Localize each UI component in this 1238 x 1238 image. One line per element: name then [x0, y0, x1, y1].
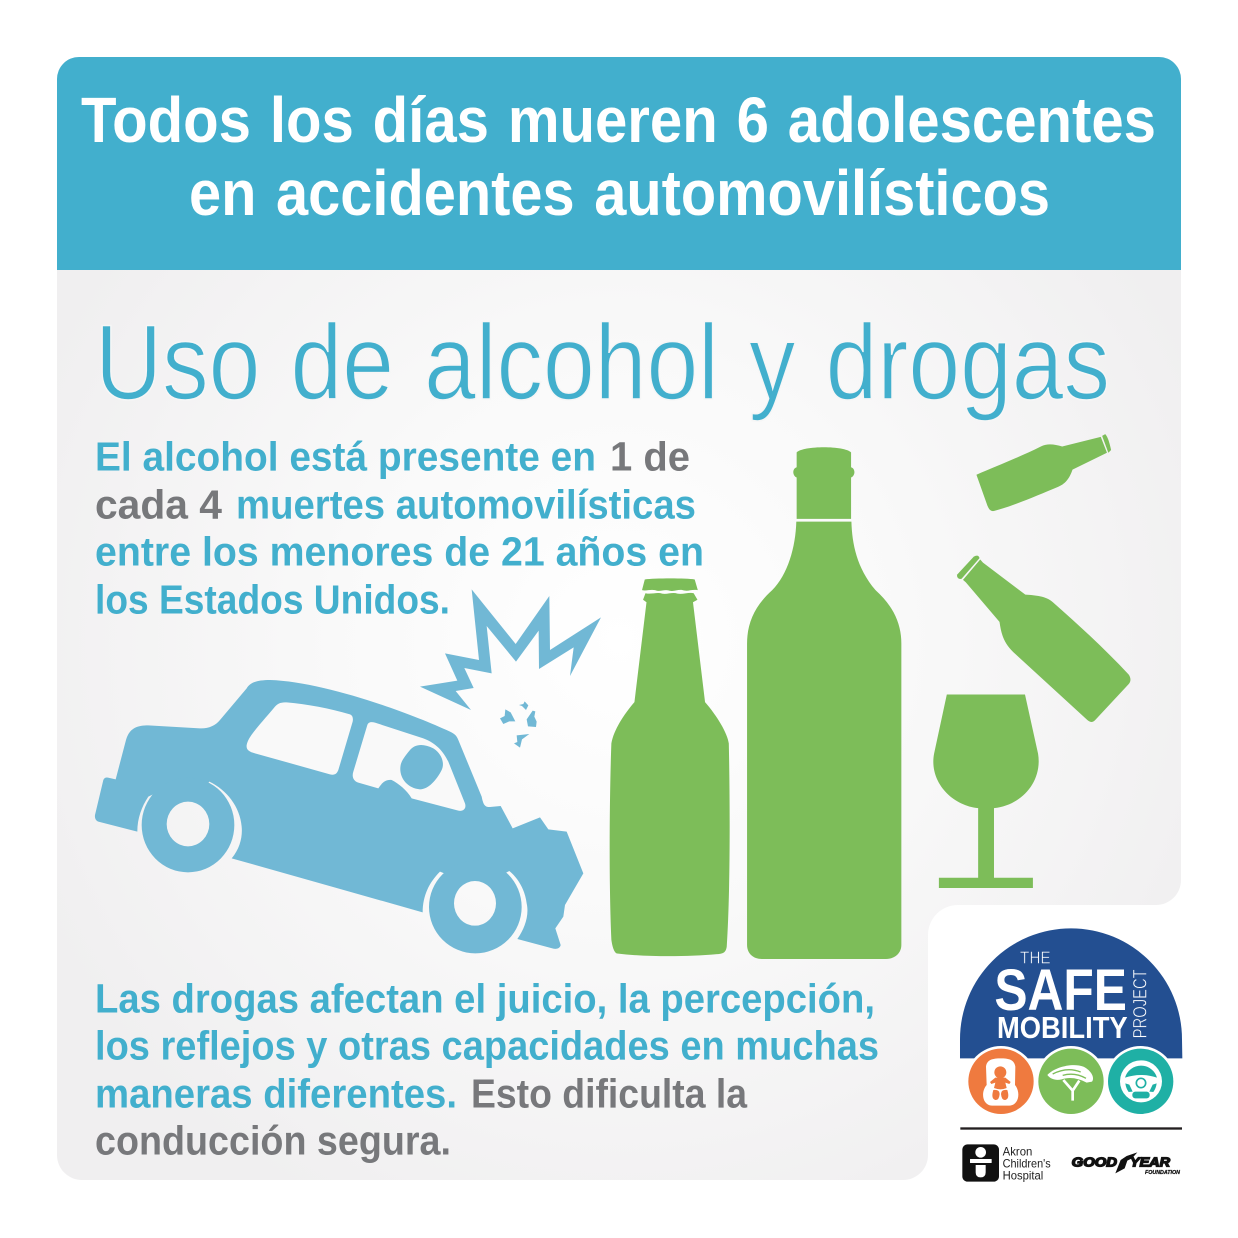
icon: tilted bottle top: [976, 434, 1111, 511]
icon: crashed car: [95, 589, 601, 953]
debris: [500, 701, 537, 748]
text block: alcohol statistic: muertes automovilísticas: [236, 481, 696, 527]
text block: drugs: conducción segura.: [95, 1118, 451, 1164]
logo: Akron Children's Hospital: [962, 1144, 1051, 1182]
header band: [57, 57, 1181, 270]
heading: Uso de alcohol y drogas: [95, 302, 1110, 422]
text block: drugs: maneras diferentes.: [95, 1070, 457, 1116]
text block: alcohol statistic: cada 4: [95, 481, 222, 527]
text block: alcohol statistic: los Estados Unidos.: [95, 576, 450, 622]
front window with driver: [353, 722, 465, 811]
logo: Akron Children's Hospital: Hospital: [1003, 1169, 1043, 1182]
text block: alcohol statistic: 1 de: [610, 434, 690, 480]
rear window: [247, 702, 353, 775]
logo: The Safe Mobility Project: [960, 928, 1182, 1182]
logo wordmark: [994, 947, 1152, 1045]
logo wordmark: THE: [1020, 947, 1051, 967]
logo wordmark: MOBILITY: [997, 1011, 1128, 1045]
icon: tilted bottle middle: [957, 556, 1130, 722]
logo: Akron Children's Hospital: Akron: [1003, 1145, 1032, 1158]
text block: drugs: Las drogas afectan el juicio, la percepción,: [95, 976, 875, 1022]
text block: alcohol statistic: entre los menores de 21 años en: [95, 529, 704, 575]
icon: beer bottle: [610, 578, 730, 956]
text block: drugs: [95, 976, 879, 1164]
logo dome: [960, 928, 1182, 1058]
title line 2: en accidentes automovilísticos: [189, 157, 1050, 229]
driver head: [400, 745, 443, 789]
icon: wine bottle: [747, 447, 901, 959]
front wheel: [429, 861, 522, 953]
logo: Goodyear Foundation: YEAR: [1130, 1156, 1171, 1170]
crash burst: [420, 589, 601, 710]
logo wordmark: SAFE: [994, 959, 1127, 1023]
logo circle: helmet: [1036, 1046, 1106, 1117]
icon: wine glass: [933, 694, 1039, 888]
logo: Goodyear Foundation: FOUNDATION: [1145, 1170, 1181, 1176]
logo: Goodyear Foundation: [1072, 1152, 1181, 1176]
text block: drugs: los reflejos y otras capacidades en muchas: [95, 1022, 879, 1068]
text block: drugs: Esto dificulta la: [471, 1070, 748, 1116]
logo: Goodyear Foundation: GOOD: [1072, 1156, 1117, 1170]
rear wheel: [142, 778, 234, 872]
logo circle: car seat: [966, 1046, 1036, 1117]
logo wordmark: PROJECT: [1131, 969, 1152, 1038]
text block: alcohol statistic: [95, 434, 704, 622]
logo circle: steering wheel: [1105, 1046, 1176, 1117]
text block: alcohol statistic: El alcohol está presente en: [95, 434, 596, 480]
logo: Akron Children's Hospital: Children's: [1003, 1157, 1051, 1170]
title line 1: Todos los días mueren 6 adolescentes: [81, 84, 1156, 156]
divider: [960, 1127, 1182, 1130]
